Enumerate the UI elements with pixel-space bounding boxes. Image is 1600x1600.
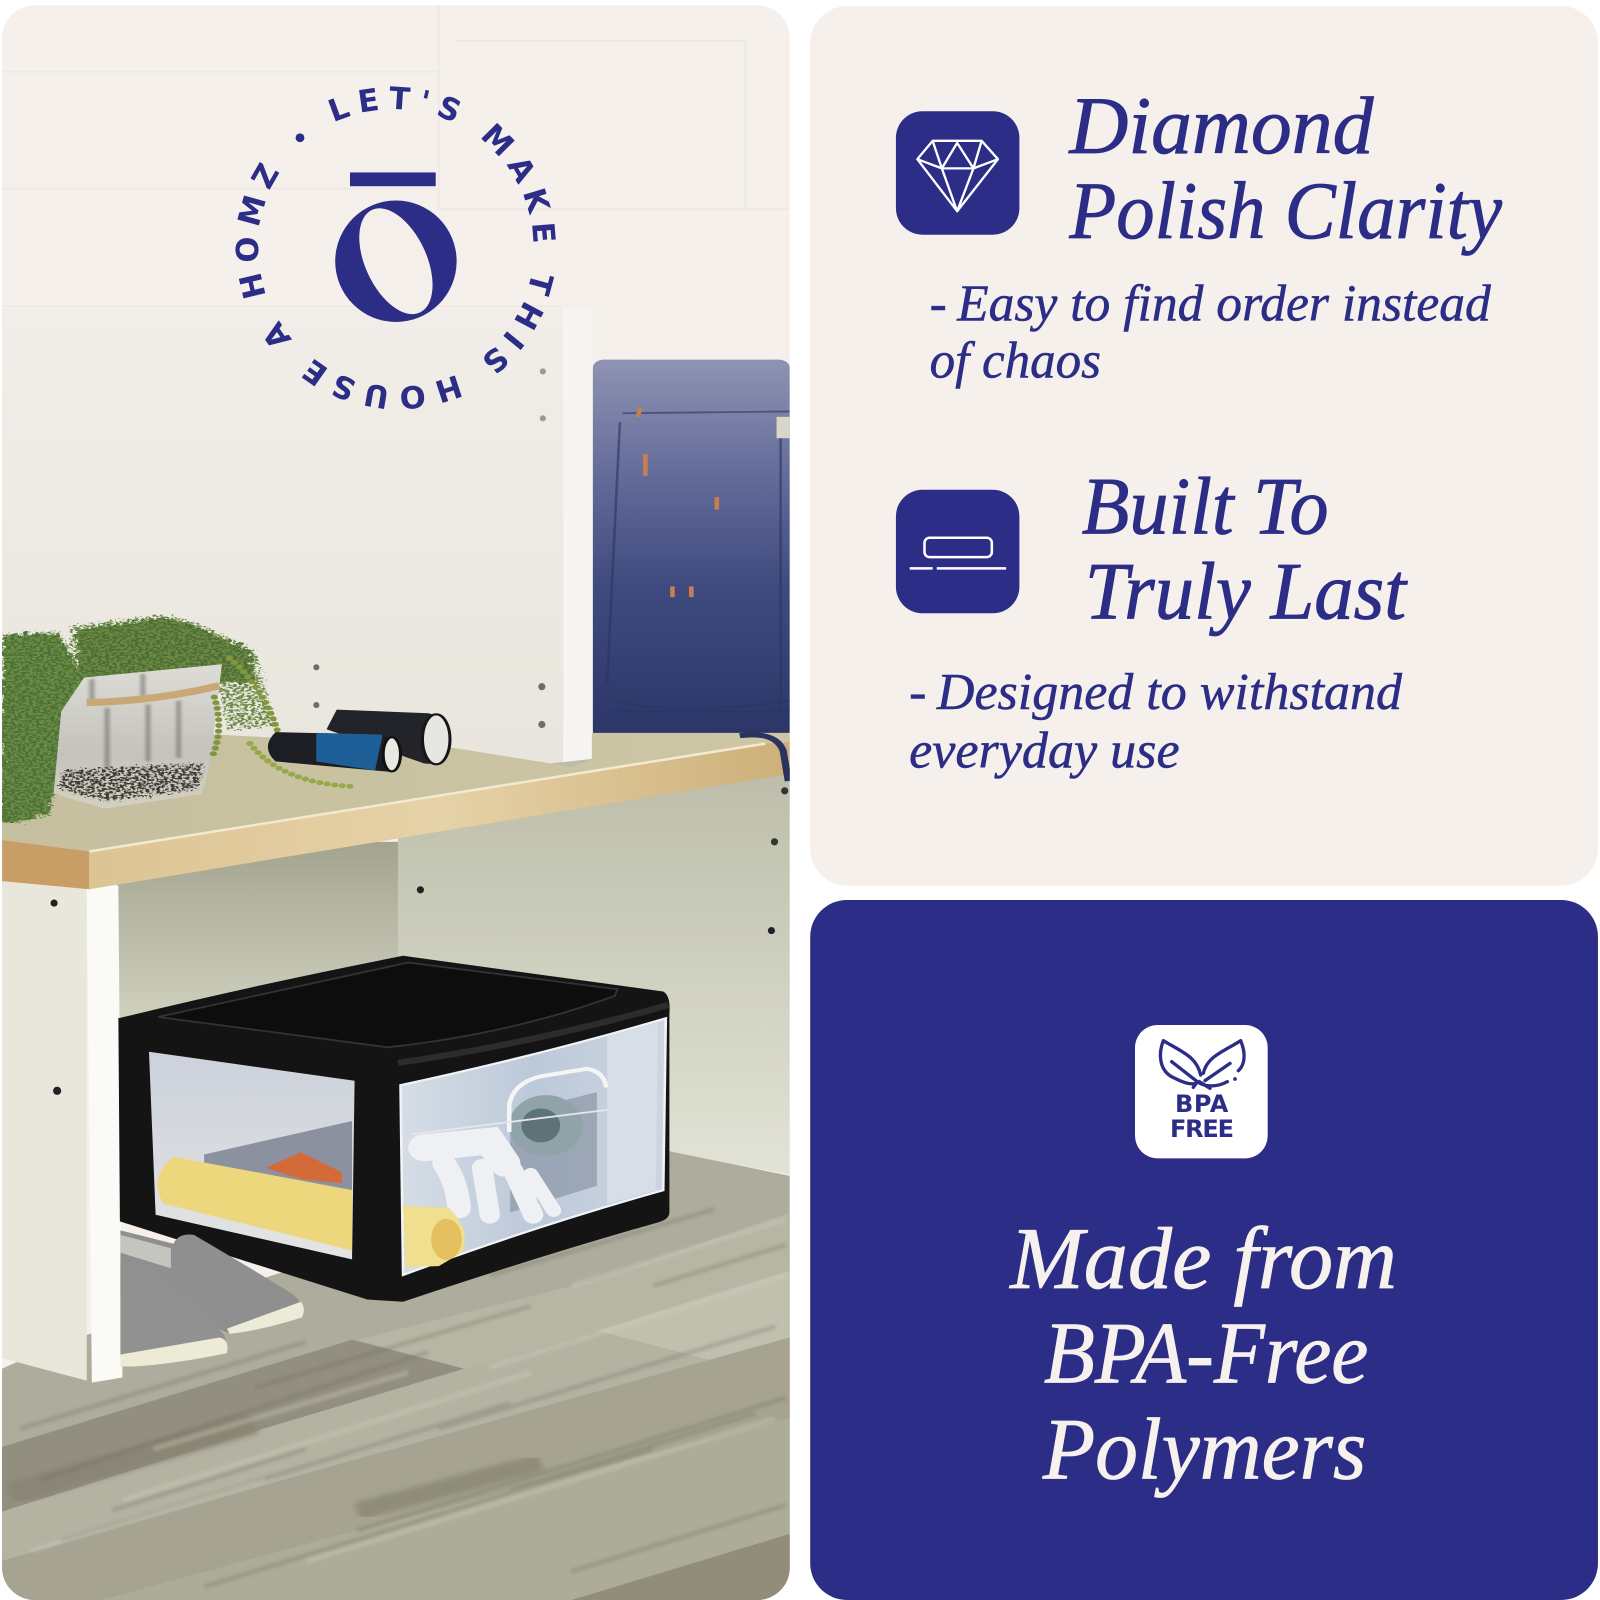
plant and pot bbox=[2, 615, 352, 822]
white shelf side panel bbox=[2, 368, 563, 764]
heading: made from BPA-free polymers bbox=[1008, 1210, 1397, 1498]
heading: built to truly last: Built To bbox=[1082, 461, 1329, 552]
heading: made from BPA-free polymers: Made from bbox=[1008, 1210, 1397, 1307]
text: easy to find order: of chaos bbox=[930, 333, 1101, 390]
heading: made from BPA-free polymers: BPA-Free bbox=[1044, 1305, 1368, 1402]
text: easy to find order bbox=[930, 275, 1492, 390]
icon: BPA free bbox=[1135, 1025, 1268, 1158]
heading: diamond polish clarity: Diamond bbox=[1068, 80, 1375, 171]
panel: features bbox=[810, 6, 1598, 886]
text: designed to withstand bbox=[909, 664, 1403, 779]
icon: BPA free: BPA bbox=[1175, 1090, 1229, 1118]
text: easy to find order: - Easy to find order instead bbox=[930, 275, 1492, 332]
heading: made from BPA-free polymers: Polymers bbox=[1042, 1401, 1366, 1498]
panel: BPA free bbox=[810, 900, 1598, 1600]
bag bbox=[593, 360, 790, 739]
icon: diamond bbox=[896, 111, 1019, 235]
side window bbox=[149, 1052, 355, 1259]
heading: built to truly last bbox=[1082, 461, 1408, 636]
storage drawer bbox=[118, 956, 670, 1367]
wooden bench bbox=[2, 719, 790, 889]
logo mark bbox=[335, 172, 457, 325]
floor wood grain bbox=[20, 1209, 786, 1587]
heading: diamond polish clarity: Polish Clarity bbox=[1068, 165, 1503, 256]
heading: built to truly last: Truly Last bbox=[1085, 545, 1408, 636]
icon: shelf bbox=[896, 490, 1019, 613]
lower back walls bbox=[117, 737, 790, 1174]
white post bbox=[2, 880, 122, 1383]
logo badge bbox=[235, 86, 556, 409]
drawer frame bbox=[118, 956, 670, 1302]
flashlights bbox=[268, 710, 450, 772]
text: designed to withstand: everyday use bbox=[909, 722, 1180, 779]
text: designed to withstand: - Designed to withstand bbox=[909, 664, 1403, 721]
heading: diamond polish clarity bbox=[1068, 80, 1503, 256]
drawer lid bbox=[158, 962, 617, 1047]
circular tagline: LET'S MAKE THIS HOUSE A HOMZ bbox=[235, 86, 556, 409]
shoes bbox=[120, 1230, 304, 1367]
wood floor bbox=[2, 1150, 790, 1600]
panel: product photo bbox=[2, 5, 790, 1600]
front window bbox=[401, 1018, 666, 1275]
icon: BPA free: FREE bbox=[1170, 1115, 1234, 1143]
